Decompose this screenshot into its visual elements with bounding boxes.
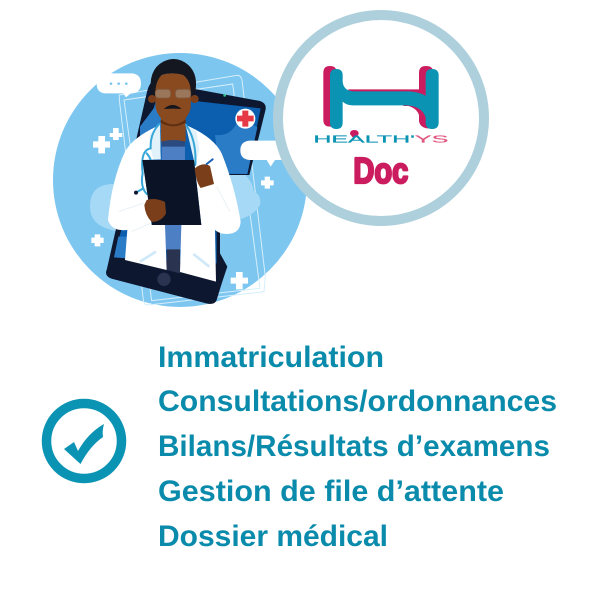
red cross badge [235, 109, 255, 129]
moustache [165, 105, 180, 108]
logo dot [350, 130, 359, 137]
coat lapels [150, 125, 199, 165]
stethoscope [136, 124, 195, 194]
logo: Health'ys Doc [313, 66, 448, 191]
item: Consultations/ordonnances: Consultations/ordonnances [158, 385, 557, 418]
clouds [90, 184, 140, 240]
back phone outline [119, 75, 265, 305]
pen [207, 159, 213, 164]
phone screen lighter area [114, 100, 257, 263]
logo H teal [330, 69, 439, 129]
clipboard [142, 160, 201, 225]
shirt and trouser [162, 137, 185, 160]
item: Gestion de file d'attente: Gestion de file d’attente [158, 475, 504, 508]
phone home button [157, 273, 171, 286]
phone body [106, 82, 266, 304]
white lab coat left [108, 125, 167, 270]
doctor [108, 59, 241, 282]
item: Bilans/Résultats d'examens: Bilans/Résultats d’examens [158, 430, 550, 463]
check icon [46, 404, 122, 478]
lower hand [144, 199, 166, 222]
collar shadow [161, 119, 186, 126]
neck [161, 118, 186, 142]
coat pocket highlights [140, 252, 209, 267]
item: Immatriculation: Immatriculation [158, 341, 384, 374]
glasses [155, 89, 191, 98]
background blue circle [53, 53, 307, 307]
speech bubble left [97, 73, 141, 97]
speech bubble right [240, 141, 287, 167]
logo Doc label: Doc [353, 150, 408, 191]
logo badge ring [278, 15, 484, 221]
phone camera dot [223, 94, 226, 97]
head [155, 73, 192, 124]
phone bottom bar [106, 257, 227, 304]
upper hand [195, 164, 214, 188]
item: Dossier médical: Dossier médical [158, 520, 388, 553]
logo wordmark: HEALTH' YS [313, 134, 448, 145]
white plus icons [91, 128, 274, 289]
phone screen [114, 97, 261, 263]
illustration: doctor emerging from phone [53, 53, 307, 307]
logo H pink shadow [323, 66, 433, 128]
feature list [158, 341, 557, 553]
hair [151, 59, 196, 95]
white lab coat right [180, 125, 241, 282]
